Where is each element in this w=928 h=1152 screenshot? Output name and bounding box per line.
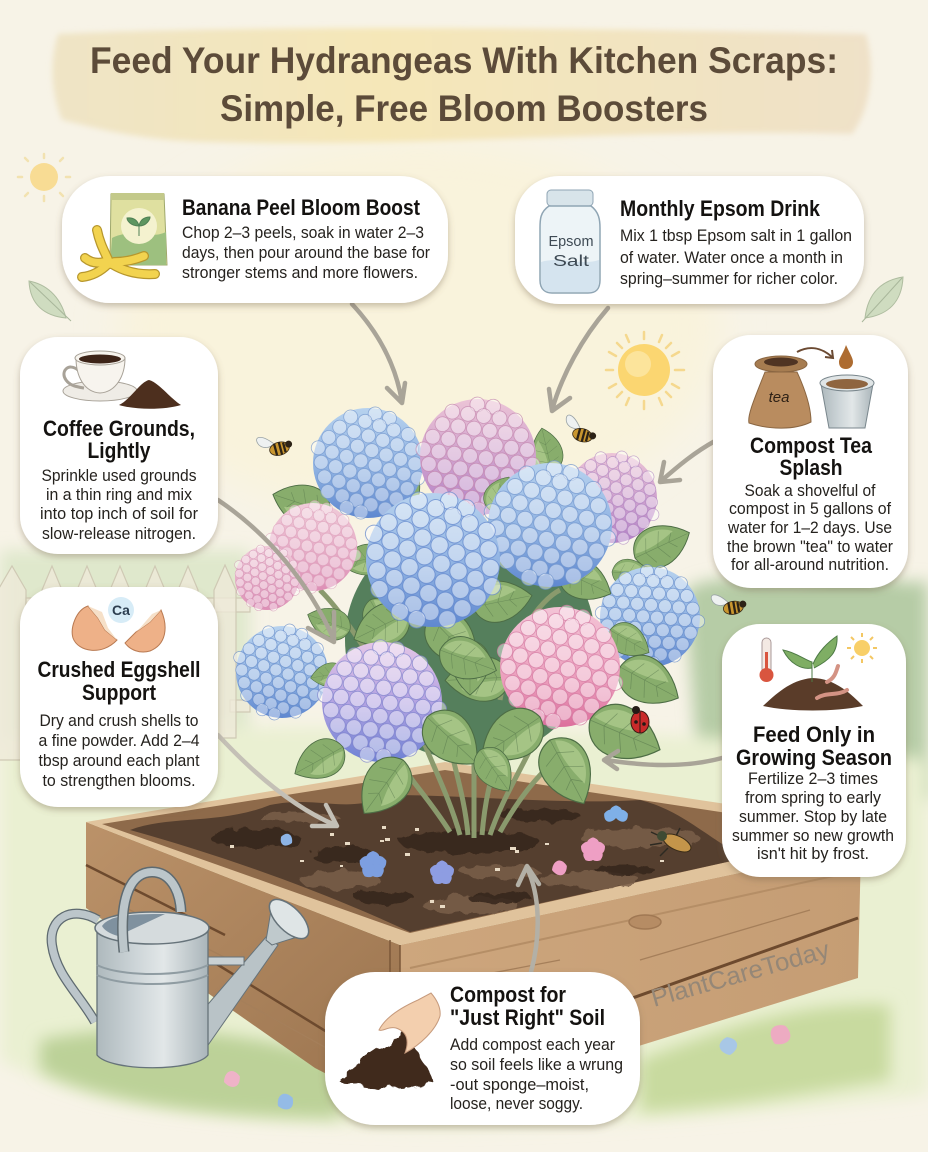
front leaves <box>286 695 670 827</box>
icon: bee centre <box>561 414 600 445</box>
feed card body: isn't hit by frost. <box>757 844 869 863</box>
bloom: far right blue <box>591 560 709 674</box>
stems <box>320 500 560 838</box>
compost card body: loose, never soggy. <box>450 1094 583 1113</box>
arrow: compost to soil <box>518 866 539 972</box>
coffee card body: Sprinkle used grounds <box>42 466 196 485</box>
epsom card body: Mix 1 tbsp Epsom salt in 1 gallon <box>620 226 852 245</box>
back leaves <box>266 425 698 652</box>
icon: epsom salt jar: Salt <box>553 253 590 270</box>
raised garden bed <box>86 762 861 1120</box>
feed card body: summer. Stop by late <box>739 807 887 826</box>
panel: monthly epsom drink <box>515 176 864 304</box>
banana card body: Chop 2–3 peels, soak in water 2–3 <box>182 223 424 242</box>
title text: Feed Your Hydrangeas With Kitchen Scraps: <box>90 40 838 81</box>
banana card body: stronger stems and more flowers. <box>182 263 418 282</box>
can spout <box>197 937 278 1048</box>
compost card title: "Just Right" Soil <box>450 1005 605 1030</box>
tea card title: Compost Tea <box>750 433 872 458</box>
eggshell card body: Dry and crush shells to <box>40 711 198 730</box>
icon: beetle <box>650 828 694 856</box>
epsom card body: of water. Water once a month in <box>620 248 843 267</box>
icon: big sun <box>606 332 684 409</box>
bed corner and plank lines <box>86 865 861 1118</box>
compost card body <box>450 1035 623 1113</box>
compost card title: Compost for <box>450 982 566 1007</box>
front blooms <box>310 448 639 771</box>
compost card body: -out sponge–moist, <box>450 1075 589 1094</box>
title text <box>90 40 838 129</box>
bed left wall <box>86 822 400 1112</box>
bed inner wall <box>86 762 861 945</box>
coffee card body: in a thin ring and mix <box>46 485 192 504</box>
banana card title: Banana Peel Bloom Boost <box>182 195 420 220</box>
coffee card title <box>43 416 195 463</box>
coffee card body: into top inch of soil for <box>40 504 198 523</box>
bloom: right mauve <box>548 435 676 561</box>
epsom card title: Monthly Epsom Drink <box>620 196 820 221</box>
compost card body: Add compost each year <box>450 1035 615 1054</box>
fence <box>0 565 250 760</box>
banana card body: days, then pour around the base for <box>182 243 430 262</box>
foliage backing <box>345 520 595 760</box>
can body <box>97 928 208 1068</box>
panel: crushed eggshell support <box>20 587 218 807</box>
feed card body: Fertilize 2–3 times <box>748 769 878 788</box>
bloom: top blue <box>295 392 441 534</box>
watering can <box>52 872 315 1068</box>
tea card body: for all-around nutrition. <box>731 555 889 574</box>
tea card body: Soak a shovelful of <box>744 481 876 500</box>
soil <box>130 795 745 932</box>
icon: small sun top left <box>18 154 70 201</box>
arrows <box>218 304 722 972</box>
coffee card body: slow-release nitrogen. <box>42 524 196 543</box>
watermark: PlantCareToday <box>648 936 833 1013</box>
hydrangea plant <box>218 390 709 838</box>
bloom: low left blue <box>218 610 346 734</box>
title text: Simple, Free Bloom Boosters <box>220 88 708 129</box>
eggshell card title <box>38 657 200 705</box>
arrow: feed to plant <box>604 751 722 769</box>
icon: tea sack and bucket <box>749 345 874 428</box>
icon: ladybug <box>631 706 649 733</box>
tea card body: water for 1–2 days. Use <box>727 518 892 537</box>
panel: feed only in growing season <box>722 624 906 877</box>
feed card title: Growing Season <box>736 745 892 770</box>
icon: tea sack and bucket: tea <box>769 389 789 406</box>
panel: compost tea splash <box>713 335 908 588</box>
eggshell card body: tbsp around each plant <box>38 751 200 770</box>
panel: banana peel bloom boost <box>62 176 448 303</box>
eggshell card body: to strengthen blooms. <box>42 771 196 790</box>
bloom: left pale pink <box>257 493 369 601</box>
soil flowers and petals <box>221 805 794 1113</box>
eggshell card title: Crushed Eggshell <box>38 657 200 682</box>
tea card title: Splash <box>780 455 842 480</box>
tea card body: compost in 5 gallons of <box>729 499 891 518</box>
feed card body <box>732 769 894 863</box>
icon: hand and compost <box>338 993 440 1088</box>
bloom: centre blue <box>338 467 528 653</box>
panel: compost for just right soil <box>325 972 640 1125</box>
bed right wall <box>400 847 861 1120</box>
coffee card body <box>40 466 198 543</box>
banana card body <box>182 223 430 282</box>
icon: bee right <box>711 590 748 618</box>
bloom: right top blue <box>470 448 630 602</box>
icon: epsom salt jar: Epsom <box>548 233 594 250</box>
feed card body: from spring to early <box>745 788 881 807</box>
icon: decorative leaf right <box>862 277 903 322</box>
arrow: banana to plant <box>352 304 405 403</box>
bloom: far left pink <box>221 533 313 623</box>
can rose <box>266 905 306 945</box>
back blooms <box>218 390 709 734</box>
tea card title <box>750 433 872 480</box>
eggshell card body: a fine powder. Add 2–4 <box>38 731 200 750</box>
feed card title: Feed Only in <box>753 722 875 747</box>
icon: coffee cup and grounds <box>63 351 181 409</box>
arrow: epsom to plant <box>549 308 608 411</box>
arrow: compost tea to plant <box>660 441 715 482</box>
can back handle <box>52 914 98 1022</box>
icon: epsom salt jar <box>540 190 600 293</box>
eggshell card title: Support <box>82 680 156 705</box>
tea card body <box>727 481 893 574</box>
icon: bee left <box>256 430 294 460</box>
title banner <box>52 28 871 143</box>
epsom card body: spring–summer for richer color. <box>620 269 838 288</box>
background garden: bushes, lawn and fence <box>0 550 928 1128</box>
coffee card title: Coffee Grounds, <box>43 416 195 441</box>
bloom: lower left purple <box>310 633 454 771</box>
icon: thermometer, plant, worm and sun <box>760 633 877 710</box>
icon: banana peel and bag <box>82 193 167 277</box>
icon: eggshells and calcium <box>72 597 165 652</box>
bloom: large pink <box>481 590 639 744</box>
can top handle <box>123 872 181 952</box>
eggshell card body <box>38 711 200 790</box>
icon: eggshells and calcium: Ca <box>112 602 130 618</box>
arrow: eggshell to soil <box>218 735 337 826</box>
arrow: coffee to plant <box>218 500 334 642</box>
compost card body: so soil feels like a wrung <box>450 1055 623 1074</box>
panel: coffee grounds <box>20 337 218 554</box>
coffee card title: Lightly <box>88 438 151 463</box>
feed card body: summer so new growth <box>732 826 894 845</box>
bloom: top pink <box>408 390 548 524</box>
icon: decorative leaf left <box>29 281 71 321</box>
middle leaves <box>309 470 689 717</box>
feed card title <box>736 722 892 770</box>
epsom card body <box>620 226 852 288</box>
compost card title <box>450 982 605 1030</box>
tea card body: the brown "tea" to water <box>727 537 893 556</box>
